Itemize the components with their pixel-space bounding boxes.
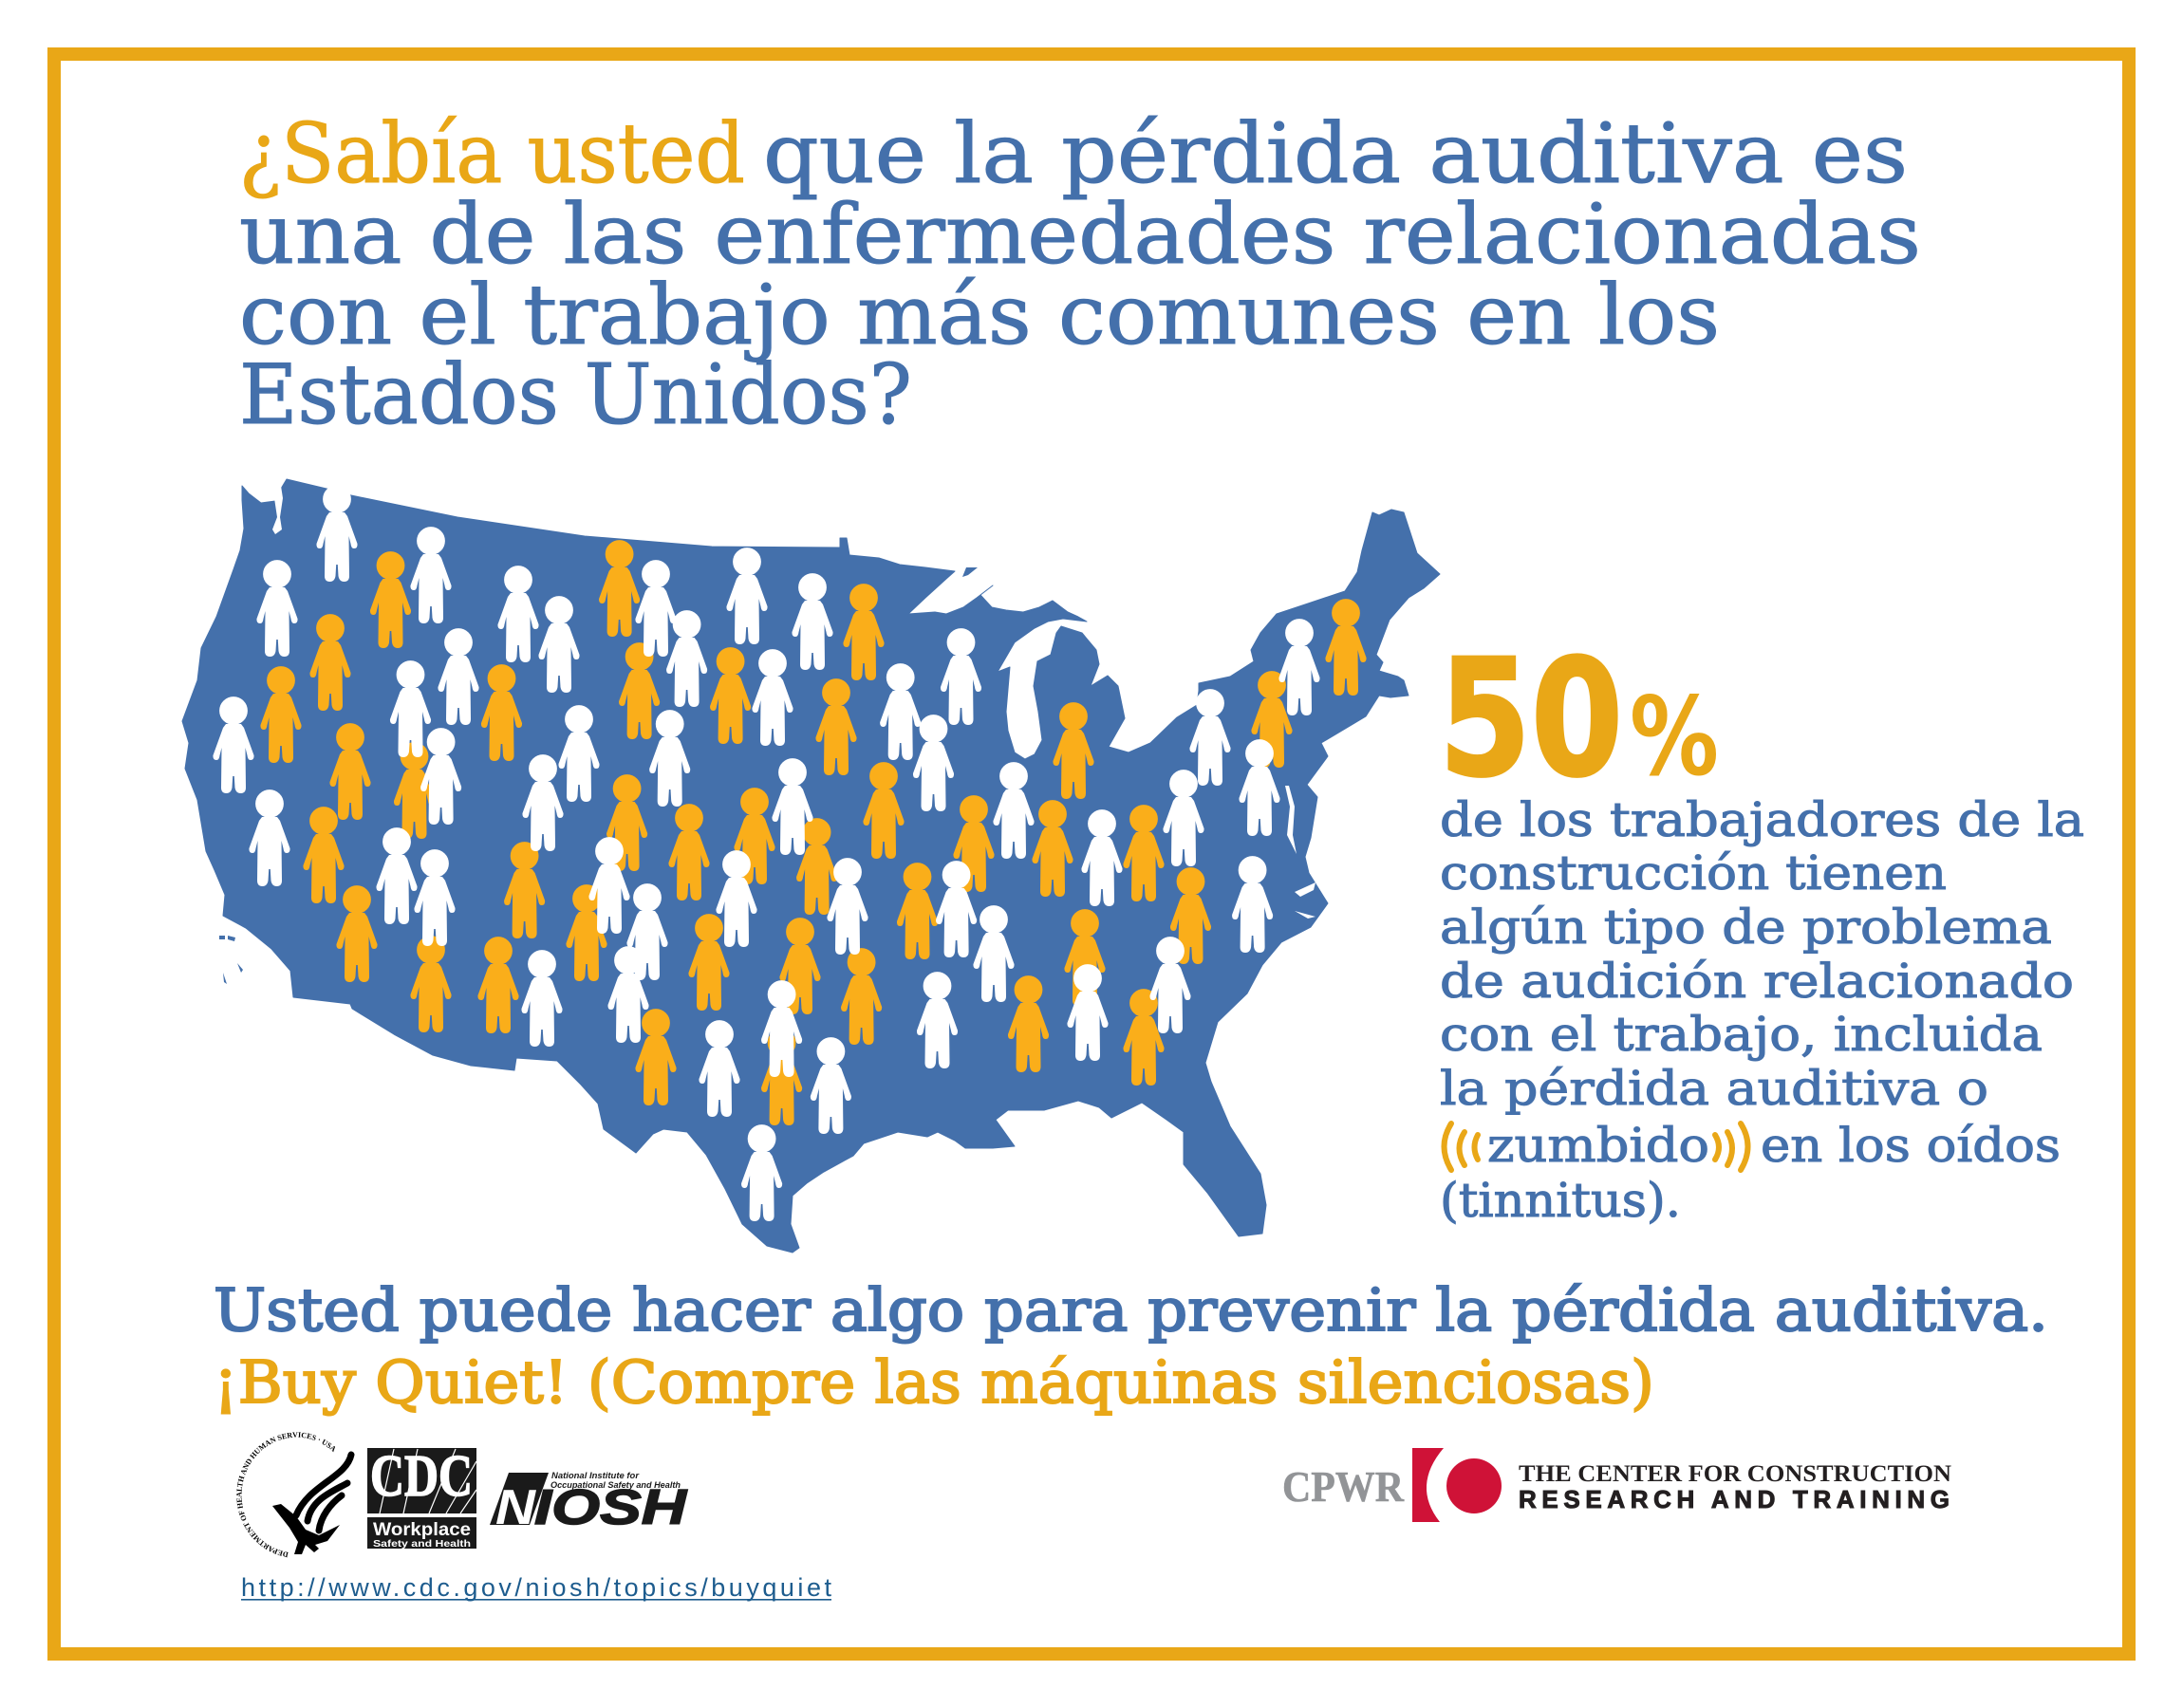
logo: CPWR: RESEARCH AND TRAINING [1519, 1485, 1950, 1513]
statistic: 50%: % [1630, 674, 1719, 800]
logo: CDC Workplace Safety and Health: Workplace [373, 1520, 471, 1540]
logo: CPWR: THE CENTER FOR CONSTRUCTION [1519, 1461, 1951, 1487]
statistic description: en los oídos [1761, 1118, 2061, 1173]
title: Estados Unidos? [239, 346, 912, 443]
call to action: ¡Buy Quiet! (Compre las máquinas silenciosas) [214, 1347, 1654, 1417]
logo: NIOSH [490, 1471, 688, 1535]
title [239, 105, 1921, 443]
logo: NIOSH: N [495, 1480, 537, 1535]
statistic description: construcción tienen [1440, 845, 1947, 900]
title: ¿Sabía usted [239, 105, 745, 202]
call to action: Usted puede hacer algo para prevenir la pérdida auditiva. [214, 1275, 2048, 1345]
statistic description: con el trabajo, incluida [1440, 1007, 2043, 1062]
logo: CDC Workplace Safety and Health: Safety and Health [373, 1538, 471, 1550]
call to action [214, 1275, 2048, 1417]
title: que la pérdida auditiva es [763, 105, 1908, 202]
icon: sound wave brackets around zumbido [1445, 1123, 1748, 1170]
map of the United States [182, 479, 1440, 1253]
logo: CPWR [1282, 1448, 1951, 1522]
statistic description: de los trabajadores de la [1440, 792, 2084, 847]
logo: NIOSH: IOSH [534, 1480, 688, 1535]
logo: CDC Workplace Safety and Health: CDC [370, 1444, 473, 1509]
Puget Sound, Chesapeake and Albemarle white details [272, 486, 1315, 919]
white workers [213, 485, 1320, 1221]
logo: CDC Workplace Safety and Health [367, 1444, 476, 1550]
logo: NIOSH: National Institute for [551, 1471, 640, 1480]
statistic description [1440, 792, 2084, 1228]
statistic description: de audición relacionado [1440, 954, 2074, 1009]
title: una de las enfermedades relacionadas [239, 186, 1921, 283]
statistic description: algún tipo de problema [1440, 900, 2052, 955]
logo: NIOSH: Occupational Safety and Health [550, 1480, 681, 1490]
statistic description: la pérdida auditiva o [1440, 1061, 1988, 1116]
logo: HHS eagle seal: DEPARTMENT OF HEALTH AND HUMAN SERVICES · USA [236, 1432, 335, 1558]
statistic description: zumbido [1487, 1118, 1709, 1173]
orange workers [260, 540, 1367, 1125]
statistic: 50%: 50 [1439, 625, 1623, 813]
logo: CPWR: CPWR [1282, 1462, 1405, 1511]
statistic description: (tinnitus). [1440, 1173, 1681, 1228]
title: con el trabajo más comunes en los [239, 267, 1720, 363]
link: Buy Quiet URL: http://www.cdc.gov/niosh/topics/buyquiet [241, 1573, 831, 1602]
